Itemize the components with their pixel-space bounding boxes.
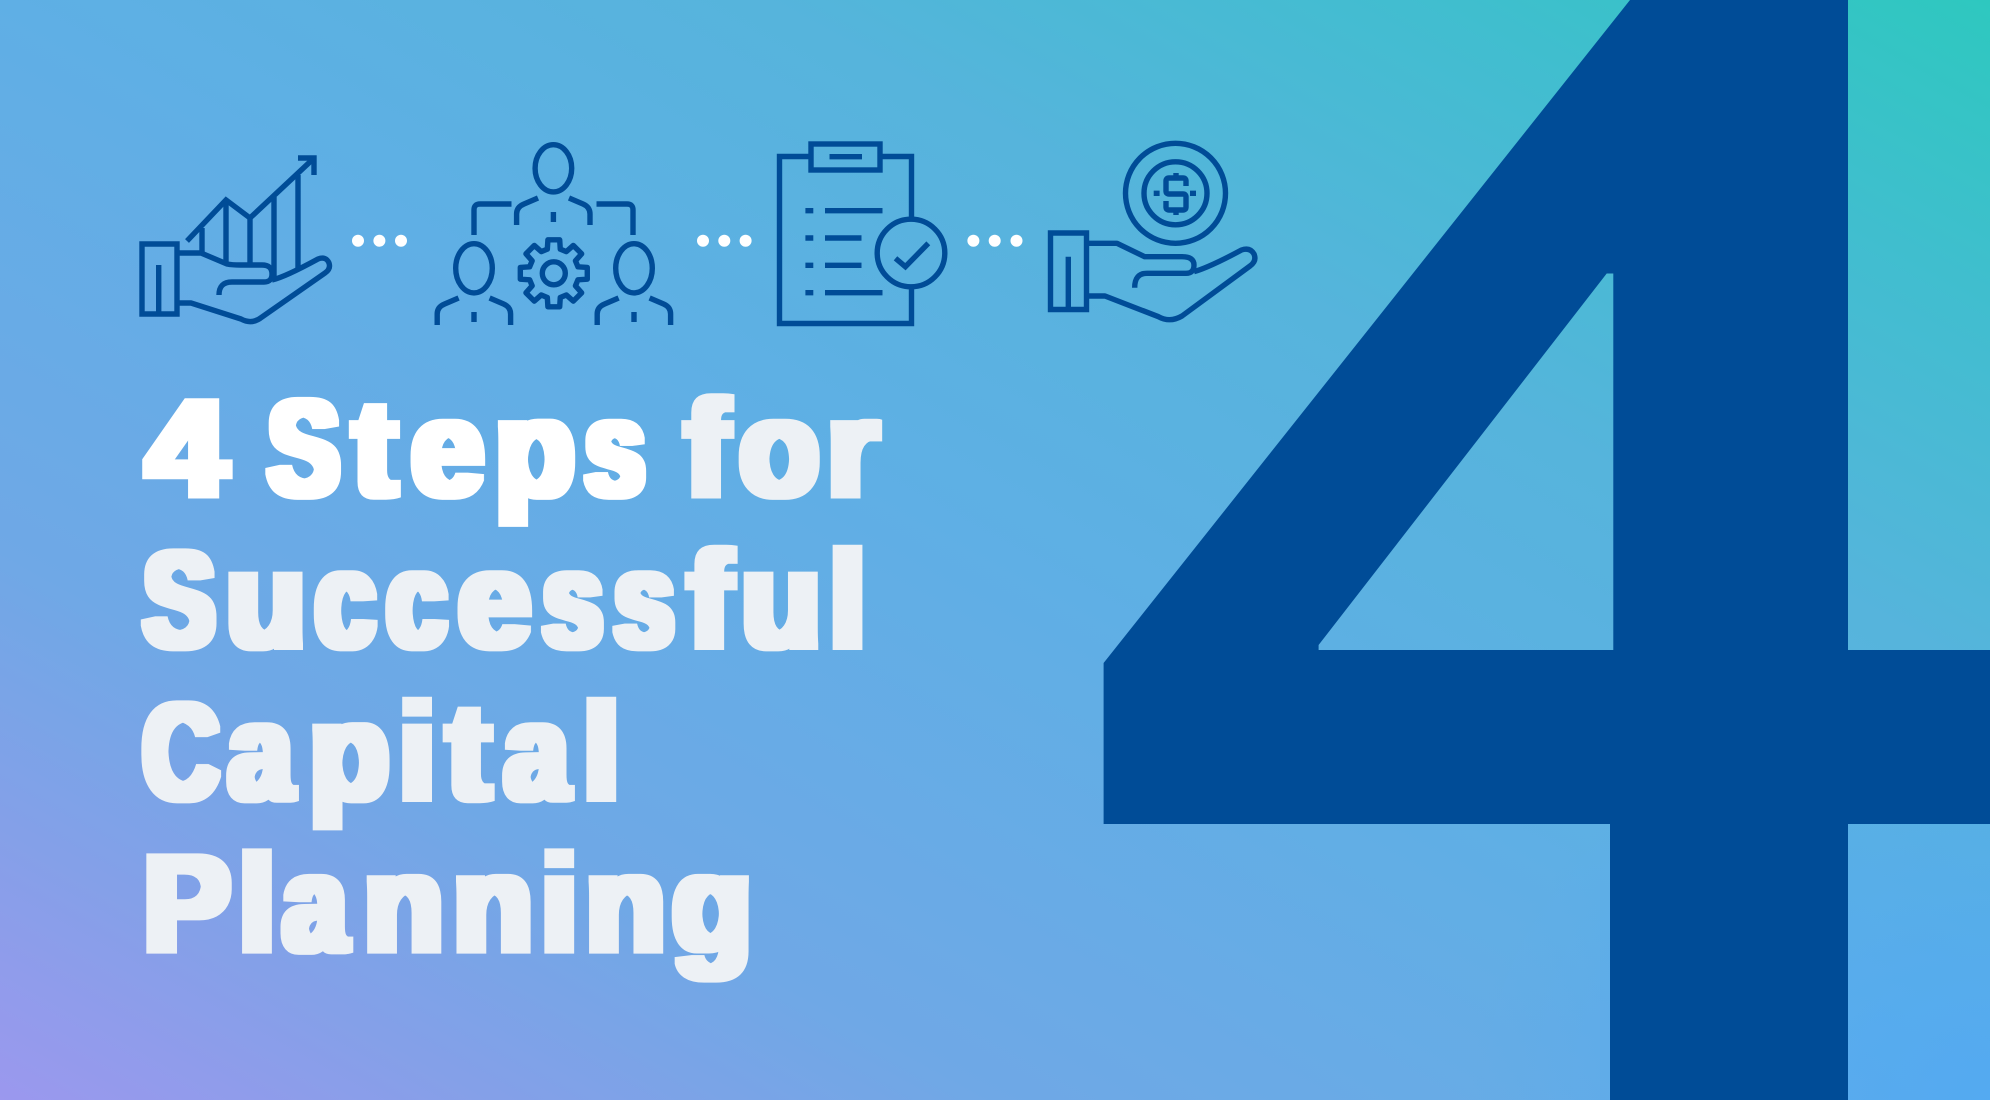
icon: team hierarchy with gear: [437, 145, 671, 325]
title: pit: [310, 676, 490, 829]
title: s: [585, 372, 645, 525]
title: u: [226, 524, 306, 677]
icon: hand holding dollar coin: [1050, 143, 1255, 320]
title: a: [505, 676, 570, 829]
title: C: [143, 676, 218, 829]
title: e: [458, 524, 531, 677]
title: nning: [364, 827, 752, 980]
title: a: [229, 676, 294, 829]
title: tep: [353, 372, 575, 525]
icon: clipboard checklist with check badge: [780, 144, 945, 324]
title: [143, 372, 878, 980]
title: s: [615, 524, 674, 677]
title: Pl: [144, 827, 275, 980]
connector dots 3: [967, 235, 1022, 247]
icon: hand holding growth chart: [142, 158, 330, 322]
title: a: [283, 827, 348, 980]
title: s: [543, 524, 602, 677]
large numeral 4 backdrop: [1104, 0, 1990, 1100]
title: c: [316, 524, 375, 677]
connector dots 1: [352, 235, 407, 247]
title: 4: [146, 372, 227, 525]
title: for: [685, 372, 878, 525]
connector dots 2: [697, 235, 752, 247]
title: S: [268, 372, 339, 525]
title: l: [583, 676, 619, 829]
title: S: [144, 524, 215, 677]
title: ful: [688, 524, 866, 677]
title: c: [387, 524, 446, 677]
